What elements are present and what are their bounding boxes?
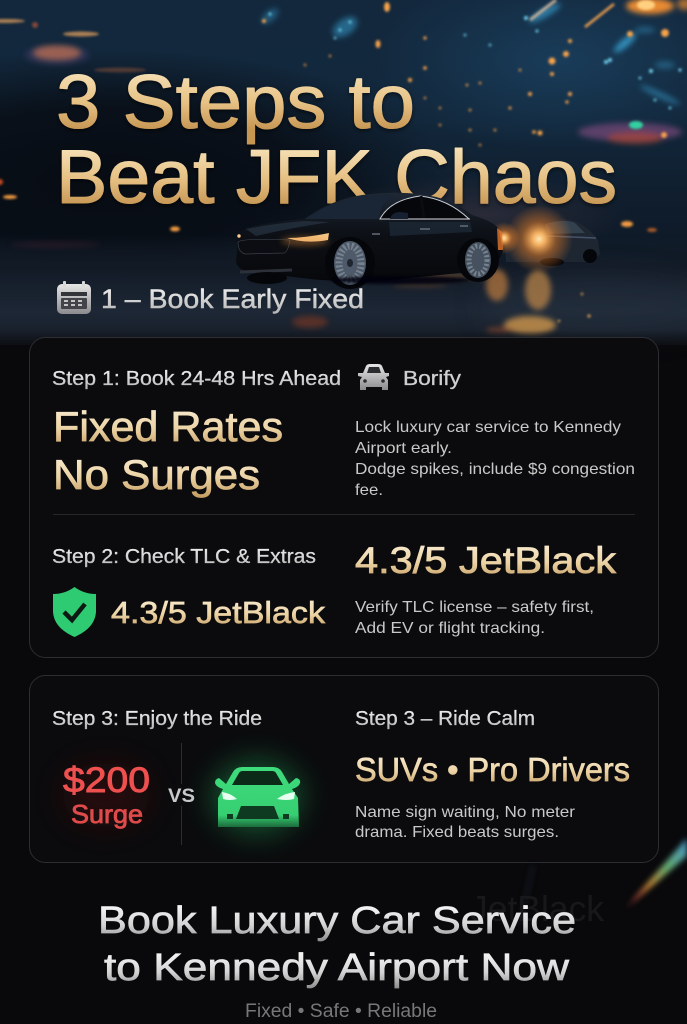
icon: grey car [358, 364, 389, 390]
title [56, 60, 617, 220]
headline: fixed rates [53, 403, 283, 498]
headline: large rating: 4.3/5 JetBlack [355, 540, 617, 581]
step one subheading: 1 – Book Early Fixed [101, 284, 364, 314]
photo: second car with headlight glare [488, 205, 600, 273]
surge price: Surge [71, 799, 143, 829]
headline: fixed rates: No Surges [53, 451, 260, 498]
call to action heading: Book Luxury Car Service [98, 900, 576, 942]
step 1 label: Step 1: Book 24-48 Hrs Ahead [52, 368, 341, 390]
night sky backdrop with bokeh [0, 0, 687, 345]
versus label [165, 784, 199, 807]
icon: green shield [53, 587, 96, 637]
rainbow light streak [520, 838, 687, 925]
wet road surface [0, 235, 687, 345]
step 1 description [355, 419, 635, 499]
versus label: VS [168, 786, 195, 807]
surge price [62, 761, 150, 829]
panel: step 3 [30, 676, 658, 862]
headline: SUVs and drivers: SUVs • Pro Drivers [355, 751, 630, 788]
surge price: $200 [63, 761, 150, 800]
step 3 label left: Step 3: Enjoy the Ride [52, 708, 262, 730]
brand label: Borify [403, 368, 461, 390]
icon: green car [211, 759, 303, 835]
step 1 description: Dodge spikes, include $9 congestion [355, 461, 635, 478]
step 3 description: Name sign waiting, No meter [355, 804, 576, 821]
ghost watermark: JetBlack [470, 888, 605, 929]
headline: fixed rates: Fixed Rates [53, 403, 283, 450]
panel: steps 1 and 2 [30, 338, 658, 658]
icon: calendar [57, 281, 91, 314]
step 2 description: Add EV or flight tracking. [355, 620, 545, 637]
step 2 description [355, 599, 594, 637]
step 3 description: drama. Fixed beats surges. [355, 824, 559, 841]
call to action heading: to Kennedy Airport Now [104, 947, 570, 989]
step 2 description: Verify TLC license – safety first, [355, 599, 594, 616]
title: 3 Steps to [56, 60, 415, 145]
title: Beat JFK Chaos [56, 135, 617, 220]
step 3 description [355, 804, 576, 841]
footer tagline: Fixed • Safe • Reliable [245, 1001, 437, 1022]
step 2 label: Step 2: Check TLC & Extras [52, 546, 316, 568]
step 1 description: Airport early. [355, 440, 452, 457]
step 1 description: Lock luxury car service to Kennedy [355, 419, 621, 436]
fade from photo into black [0, 330, 687, 352]
small rating: 4.3/5 JetBlack [111, 595, 326, 630]
photo: black luxury sedan [236, 193, 503, 289]
step 1 description: fee. [355, 482, 383, 499]
step 3 label right: Step 3 – Ride Calm [355, 708, 535, 730]
call to action heading [98, 900, 576, 989]
